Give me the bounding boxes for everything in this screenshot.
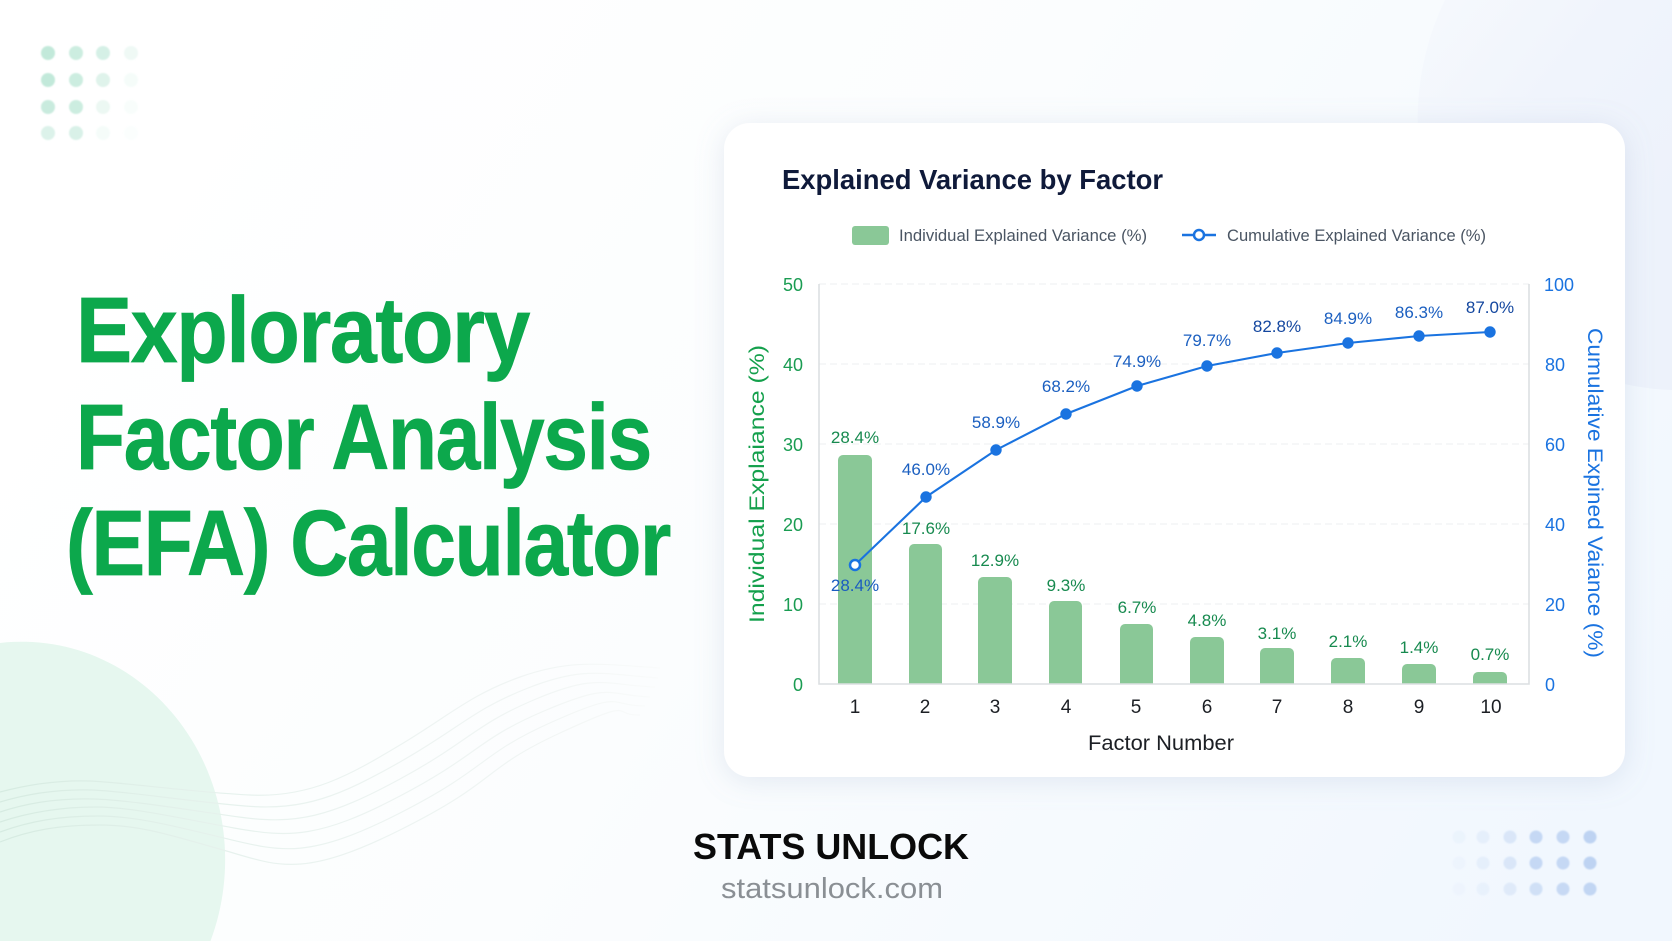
right axis ticks: 0 <box>1545 675 1555 695</box>
left axis ticks: 10 <box>783 595 803 615</box>
x axis ticks: 4 <box>1061 697 1072 718</box>
cumulative value labels: 84.9% <box>1324 309 1372 328</box>
bar value labels: 28.4% <box>831 428 879 447</box>
bar value labels: 2.1% <box>1329 632 1367 651</box>
axes <box>819 284 1529 684</box>
bar value labels: 9.3% <box>1047 576 1085 595</box>
panel: chart card <box>724 123 1625 777</box>
legend: individual label: Individual Explained Variance (%) <box>899 226 1147 245</box>
cumulative value labels: 28.4% <box>831 576 879 595</box>
cumulative value labels: 86.3% <box>1395 303 1443 322</box>
decorative blob: bottom left <box>0 642 225 941</box>
left axis ticks: 20 <box>783 515 803 535</box>
left axis ticks: 50 <box>783 275 803 295</box>
right axis ticks: 100 <box>1544 275 1574 295</box>
legend <box>852 226 1486 245</box>
right axis title: Cumulative Expined Vaiance (%) <box>1583 328 1606 658</box>
bar chart: individual variance <box>838 455 1507 684</box>
x axis ticks: 3 <box>990 697 1000 718</box>
cumulative value labels: 58.9% <box>972 413 1020 432</box>
bar value labels: 3.1% <box>1258 624 1296 643</box>
right axis ticks <box>1544 275 1574 695</box>
x axis ticks: 8 <box>1343 697 1353 718</box>
x axis title: Factor Number <box>1088 732 1234 755</box>
title <box>66 278 670 595</box>
cumulative line <box>855 332 1490 565</box>
x axis ticks <box>850 697 1502 718</box>
chart title: Explained Variance by Factor <box>782 164 1163 195</box>
title: Factor Analysis <box>76 385 651 489</box>
bar value labels: 0.7% <box>1471 645 1509 664</box>
cumulative value labels: 68.2% <box>1042 377 1090 396</box>
grid lines <box>819 284 1529 604</box>
legend: cumulative label: Cumulative Explained Variance (%) <box>1227 226 1486 245</box>
cumulative value labels <box>831 298 1514 595</box>
cumulative value labels: 79.7% <box>1183 331 1231 350</box>
legend: individual swatch <box>852 226 889 245</box>
title: (EFA) Calculator <box>66 491 670 595</box>
bar value labels: 4.8% <box>1188 611 1226 630</box>
bar value labels: 12.9% <box>971 551 1019 570</box>
x axis ticks: 2 <box>920 697 930 718</box>
x axis ticks: 1 <box>850 697 860 718</box>
cumulative value labels: 46.0% <box>902 460 950 479</box>
cumulative markers <box>850 326 1496 570</box>
legend: cumulative marker <box>1182 230 1216 240</box>
bar value labels <box>831 428 1509 664</box>
left axis title: Individual Explaiance (%) <box>746 345 769 623</box>
brand name: STATS UNLOCK <box>693 826 969 867</box>
x axis ticks: 10 <box>1480 697 1502 718</box>
right axis ticks: 20 <box>1545 595 1565 615</box>
cumulative value labels: 87.0% <box>1466 298 1514 317</box>
x axis ticks: 6 <box>1202 697 1212 718</box>
decorative dots: bottom right <box>1452 830 1596 896</box>
bar value labels: 17.6% <box>902 519 950 538</box>
title: Exploratory <box>76 278 531 382</box>
right axis ticks: 80 <box>1545 355 1565 375</box>
decorative blob: top right <box>1418 0 1672 390</box>
x axis ticks: 7 <box>1272 697 1282 718</box>
bar value labels: 1.4% <box>1400 638 1438 657</box>
left axis ticks: 30 <box>783 435 803 455</box>
bar value labels: 6.7% <box>1118 598 1156 617</box>
left axis ticks: 0 <box>793 675 803 695</box>
decorative wave lines <box>0 664 660 864</box>
left axis ticks: 40 <box>783 355 803 375</box>
x axis ticks: 5 <box>1131 697 1141 718</box>
brand url: statsunlock.com <box>721 873 943 905</box>
left axis ticks <box>783 275 803 695</box>
right axis ticks: 40 <box>1545 515 1565 535</box>
x axis ticks: 9 <box>1414 697 1424 718</box>
cumulative value labels: 74.9% <box>1113 352 1161 371</box>
decorative dots: top left <box>41 46 138 140</box>
card background <box>724 123 1625 777</box>
right axis ticks: 60 <box>1545 435 1565 455</box>
cumulative value labels: 82.8% <box>1253 317 1301 336</box>
